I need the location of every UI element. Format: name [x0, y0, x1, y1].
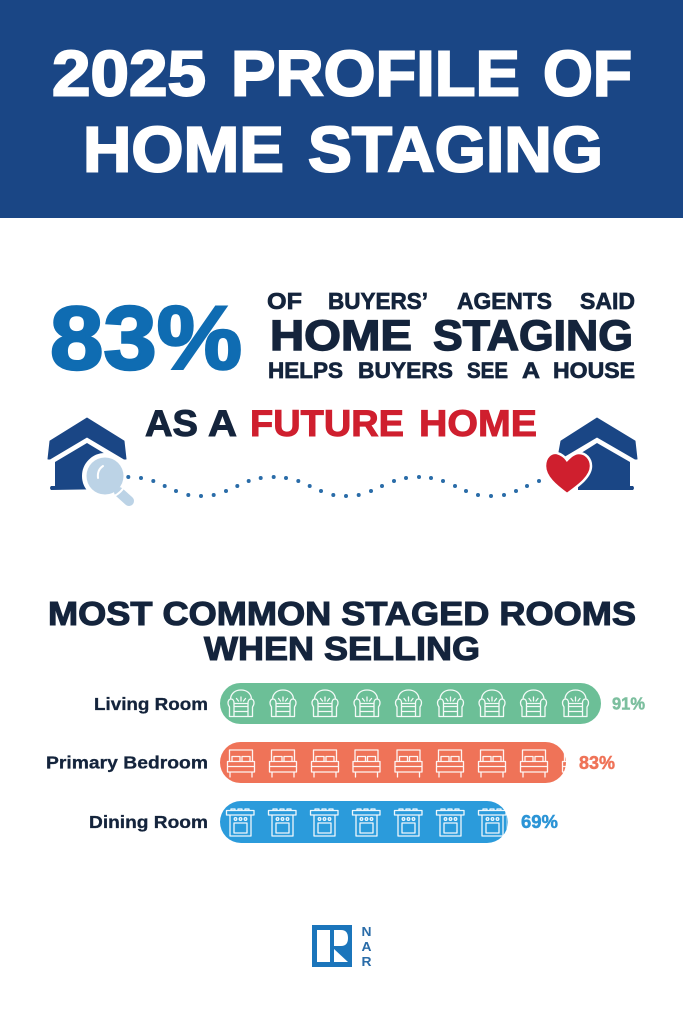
statement text: HELPS [268, 358, 343, 383]
statement text: HOME [270, 312, 412, 360]
tagline: as a future home [145, 402, 537, 444]
big statistic 83%: 83% [50, 289, 242, 389]
title banner: HOME [83, 114, 284, 186]
bar row: primary bedroom 83%: Primary Bedroom [46, 752, 208, 772]
tagline: as a future home: FUTURE [250, 402, 404, 444]
bar row: dining room 69% [89, 801, 558, 843]
title banner: 2025 [52, 38, 206, 110]
icon: house with heart [545, 418, 637, 494]
logo: NAR realtor mark [312, 924, 372, 969]
statement text: BUYERS [358, 358, 453, 383]
statement text: BUYERS’ [328, 288, 428, 314]
statement text [267, 288, 635, 383]
tagline: as a future home: AS [145, 402, 198, 444]
tagline: as a future home: A [208, 402, 237, 444]
statement text: SAID [580, 288, 635, 314]
heading: most common staged rooms: WHEN SELLING [204, 631, 480, 668]
logo: NAR realtor mark: A [362, 939, 372, 954]
bar row: primary bedroom 83%: 83% [579, 753, 615, 773]
bar row: living room 91%: 91% [612, 694, 645, 714]
logo: NAR realtor mark: N [362, 924, 372, 939]
statement text: HOUSE [553, 358, 635, 383]
title banner [0, 0, 683, 218]
statement text: SEE [467, 358, 508, 383]
statement text: OF [267, 288, 302, 314]
bar row: living room 91% [94, 683, 645, 724]
statement text: AGENTS [457, 288, 552, 314]
title banner: STAGING [308, 114, 603, 186]
bar row: living room 91%: Living Room [94, 694, 208, 714]
statement text: A [522, 358, 540, 383]
bar row: dining room 69%: 69% [521, 812, 558, 832]
bar row: dining room 69%: Dining Room [89, 812, 208, 832]
title banner: PROFILE [231, 38, 520, 110]
heading: most common staged rooms: MOST COMMON STAGED ROOMS [48, 596, 636, 633]
statement text: STAGING [433, 312, 633, 360]
bar row: primary bedroom 83% [46, 742, 615, 783]
tagline: as a future home: HOME [419, 402, 537, 444]
heading: most common staged rooms [48, 596, 636, 668]
dotted path between houses [126, 475, 541, 498]
logo: NAR realtor mark: R [362, 954, 372, 969]
icon: house with magnifying glass [48, 418, 129, 501]
title banner: OF [543, 38, 632, 110]
